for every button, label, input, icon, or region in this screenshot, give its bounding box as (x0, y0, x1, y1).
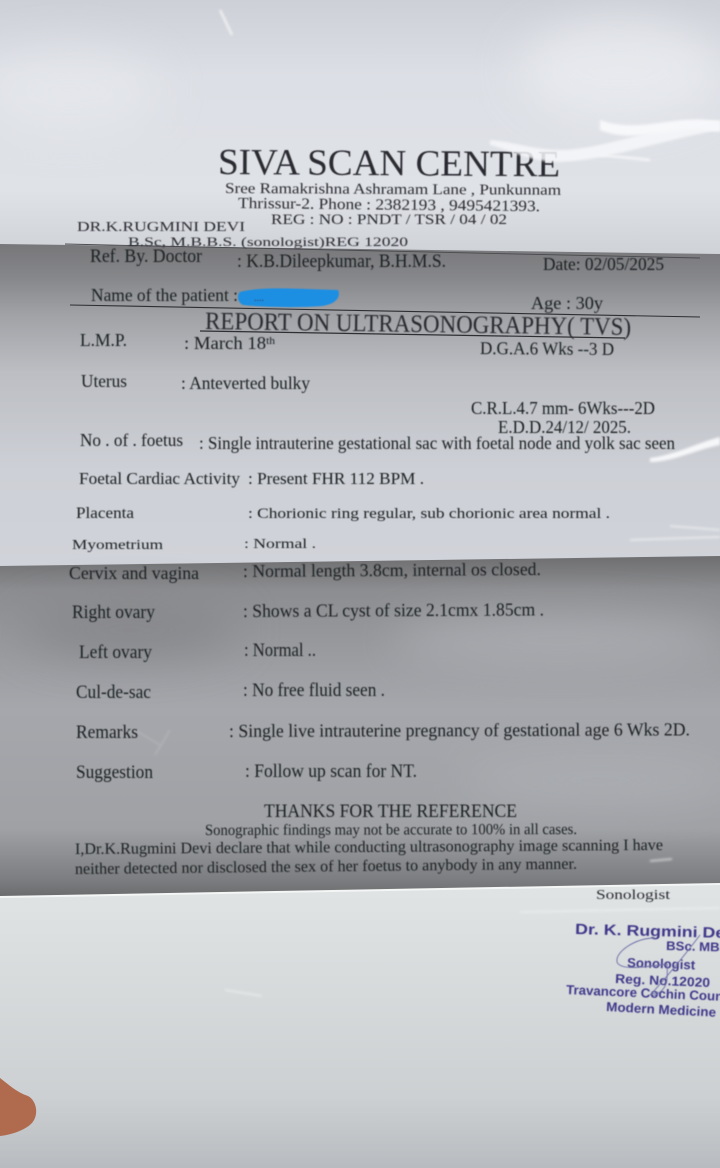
clinic header (218, 142, 561, 228)
stamp registration: Reg. No.12020 (615, 971, 710, 990)
cul-de-sac value: : No free fluid seen . (243, 681, 385, 701)
left ovary value: : Normal .. (244, 641, 316, 661)
cardiac activity value: : Present FHR 112 BPM . (248, 469, 424, 488)
report date: Date: 02/05/2025 (543, 254, 664, 274)
LMP value: : March 18 (184, 333, 263, 353)
declaration line 1: I,Dr.K.Rugmini Devi declare that while conducting ultrasonography image scanning I have (75, 837, 663, 858)
redacted patient name (238, 288, 339, 307)
placenta label: Placenta (76, 505, 134, 522)
cervix value: : Normal length 3.8cm, internal os closed. (243, 559, 541, 581)
uterus label: Uterus (81, 371, 127, 391)
glare over clinic name (490, 120, 720, 162)
LMP label: L.M.P. (80, 330, 127, 350)
referring doctor value: : K.B.Dileepkumar, B.H.M.S. (237, 251, 446, 272)
accuracy disclaimer: Sonographic findings may not be accurate to 100% in all cases. (205, 821, 577, 839)
ruled lines (65, 244, 700, 338)
cervix label: Cervix and vagina (69, 563, 199, 583)
cul-de-sac label: Cul-de-sac (76, 683, 151, 703)
signature (617, 935, 700, 996)
referring doctor: Ref. By. Doctor (90, 246, 203, 267)
suggestion value: : Follow up scan for NT. (245, 762, 417, 782)
findings bottom (69, 559, 690, 878)
left ovary label: Left ovary (79, 643, 153, 663)
findings top (72, 330, 675, 553)
patient age: Age : 30y (531, 293, 603, 313)
clinic phone: Thrissur-2. Phone : 2382193 , 9495421393. (238, 195, 540, 215)
report heading: REPORT ON ULTRASONOGRAPHY( TVS) (205, 308, 631, 341)
stamp medicine: Modern Medicine (606, 999, 716, 1020)
remarks label: Remarks (76, 723, 138, 743)
cardiac activity label: Foetal Cardiac Activity (79, 469, 240, 488)
patient details (90, 246, 664, 313)
doctor qualifications: B.Sc, M.B.B.S. (sonologist)REG 12020 (128, 234, 408, 249)
clinic address: Sree Ramakrishna Ashramam Lane , Punkunnam (225, 181, 561, 199)
uterus value: : Anteverted bulky (181, 373, 310, 393)
declaration line 2: neither detected nor disclosed the sex of her foetus to anybody in any manner. (75, 856, 577, 878)
doctor name: DR.K.RUGMINI DEVI (77, 220, 245, 235)
myometrium label: Myometrium (72, 538, 163, 553)
patient name label: Name of the patient : (91, 285, 238, 305)
thanks note: THANKS FOR THE REFERENCE (264, 802, 517, 822)
redacted patient name: .... (254, 293, 264, 304)
clinic name: SIVA SCAN CENTRE (218, 142, 560, 185)
doctor stamp (566, 921, 720, 1020)
LMP value: th (266, 335, 276, 347)
EDD: E.D.D.24/12/ 2025. (498, 417, 631, 437)
myometrium value: : Normal . (244, 536, 316, 551)
right ovary value: : Shows a CL cyst of size 2.1cmx 1.85cm . (243, 600, 544, 622)
foetus number label: No . of . foetus (80, 430, 183, 450)
remarks value: : Single live intrauterine pregnancy of gestational age 6 Wks 2D. (229, 720, 690, 742)
foetus number value: : Single intrauterine gestational sac with foetal node and yolk sac seen (199, 433, 675, 453)
stamp name: Dr. K. Rugmini Devi (575, 921, 720, 942)
sonologist label: Sonologist (596, 888, 670, 903)
DGA: D.G.A.6 Wks --3 D (480, 338, 614, 359)
CRL: C.R.L.4.7 mm- 6Wks---2D (471, 398, 655, 418)
registration number: REG : NO : PNDT / TSR / 04 / 02 (271, 212, 507, 228)
stamp role: Sonologist (627, 955, 696, 972)
right ovary label: Right ovary (72, 603, 156, 623)
suggestion label: Suggestion (76, 763, 153, 783)
placenta value: : Chorionic ring regular, sub chorionic area normal . (248, 506, 610, 522)
fingertip (0, 1078, 36, 1136)
